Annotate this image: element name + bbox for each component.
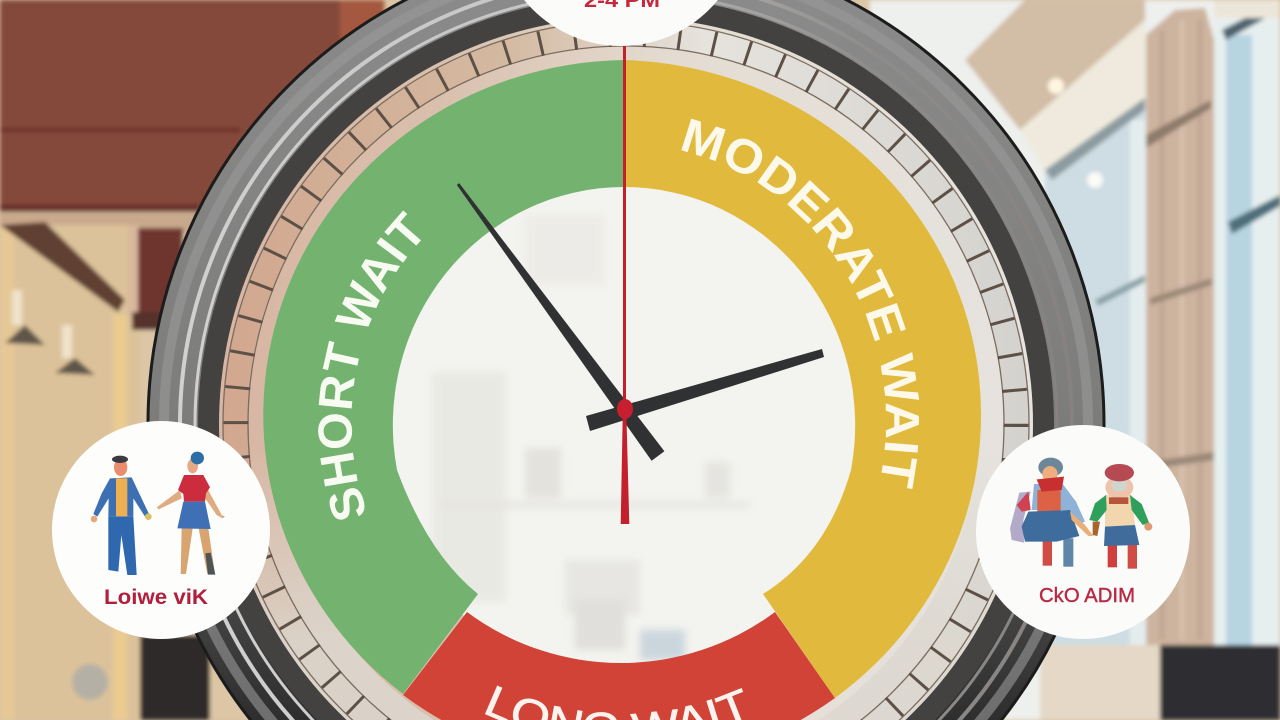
red second hand <box>621 46 629 524</box>
gauge segment: short wait <box>263 60 624 694</box>
label: short wait: SHORT WAIT <box>318 210 421 520</box>
metal clock bezel <box>148 0 1104 720</box>
faint room reflection <box>432 215 750 660</box>
centre hub <box>617 399 633 419</box>
top time badge <box>496 0 746 46</box>
clock hands <box>457 46 824 524</box>
minute hand <box>457 183 664 461</box>
label: moderate wait: MODERATE WAIT <box>681 118 920 489</box>
gauge segment: moderate wait <box>624 60 981 698</box>
right room and windows <box>870 0 1280 720</box>
lower left room <box>0 213 210 720</box>
icon: man and woman <box>91 452 225 575</box>
wood wall panels <box>0 0 385 212</box>
right badge: older couple <box>976 425 1190 639</box>
clock face centre <box>379 173 869 677</box>
tick ring <box>219 17 1033 720</box>
badge caption: Loiwe viK <box>104 586 208 609</box>
badge caption: CkO ADIM <box>1039 585 1135 607</box>
icon: elderly couple <box>1010 458 1152 569</box>
hour hand <box>586 349 824 431</box>
gauge segment: long wait <box>403 612 835 720</box>
left badge: low wait people <box>52 421 270 639</box>
